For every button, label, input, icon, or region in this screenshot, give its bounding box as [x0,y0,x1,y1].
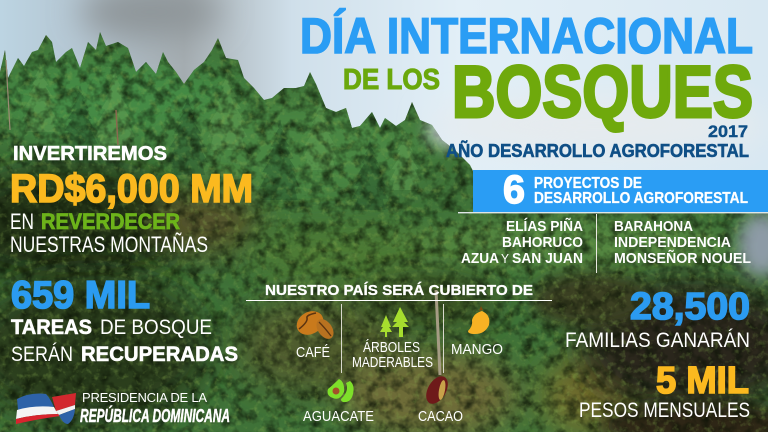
stat: pesos: 5 MIL [656,360,749,402]
tareas block: SERÁN [11,343,73,366]
year subtitle: 2017 [708,122,748,141]
province list: BARAHONA [614,218,693,235]
investment block: EN [10,209,34,234]
crop: aguacate [303,379,374,425]
province list: BAHORUCO [502,234,583,251]
logo: presidencia: PRESIDENCIA DE LA [82,390,207,405]
logo: presidencia [16,390,230,426]
panel: crops [246,282,552,425]
province list [461,214,751,273]
tareas block: 659 MIL [11,274,150,317]
crop: aguacate: AGUACATE [303,408,374,425]
title: DE LOS [343,64,440,96]
crop: árboles maderables: MADERABLES [352,354,433,371]
crop: café [292,306,337,361]
crop: mango: MANGO [451,341,503,358]
province list: ELÍAS PIÑA [506,217,583,235]
tareas block: DE BOSQUE [100,316,212,339]
investment block: INVERTIREMOS [13,143,167,165]
stat: familias [565,286,750,352]
province list: Y [501,251,509,266]
stat: pesos [579,360,750,422]
panel: proyectos banner [458,168,768,213]
crop: mango [451,306,503,358]
crop: árboles maderables [352,307,433,371]
investment block: NUESTRAS MONTAÑAS [10,232,208,257]
crops heading: NUESTRO PAÍS SERÁ CUBIERTO DE [265,282,533,299]
panel: proyectos banner: PROYECTOS DE [534,175,642,192]
year subtitle: AÑO DESARROLLO AGROFORESTAL [446,140,749,161]
crop: cacao [418,373,463,425]
province list: SAN JUAN [512,250,583,267]
province list: MONSEÑOR NOUEL [614,249,751,267]
crop: café: CAFÉ [296,344,330,361]
crop: cacao: CACAO [418,408,463,425]
panel: proyectos banner: 6 [503,168,525,212]
title [300,8,753,133]
tareas block: RECUPERADAS [81,343,238,366]
province list: INDEPENDENCIA [614,234,731,251]
logo: presidencia: REPÚBLICA DOMINICANA [80,405,230,426]
crop: árboles maderables: ÁRBOLES [363,339,420,356]
panel: proyectos banner: DESARROLLO AGROFORESTAL [534,190,748,207]
icon: flag [16,393,76,424]
tareas block [11,274,238,366]
investment block: RD$6,000 MM [10,167,253,211]
investment block: REVERDECER [41,209,180,234]
investment block [10,143,253,257]
province list: AZUA [461,250,499,267]
stat: familias: FAMILIAS GANARÁN [565,329,750,352]
stat: familias: 28,500 [630,286,750,328]
tareas block: TAREAS [11,316,92,339]
year subtitle [446,122,749,161]
